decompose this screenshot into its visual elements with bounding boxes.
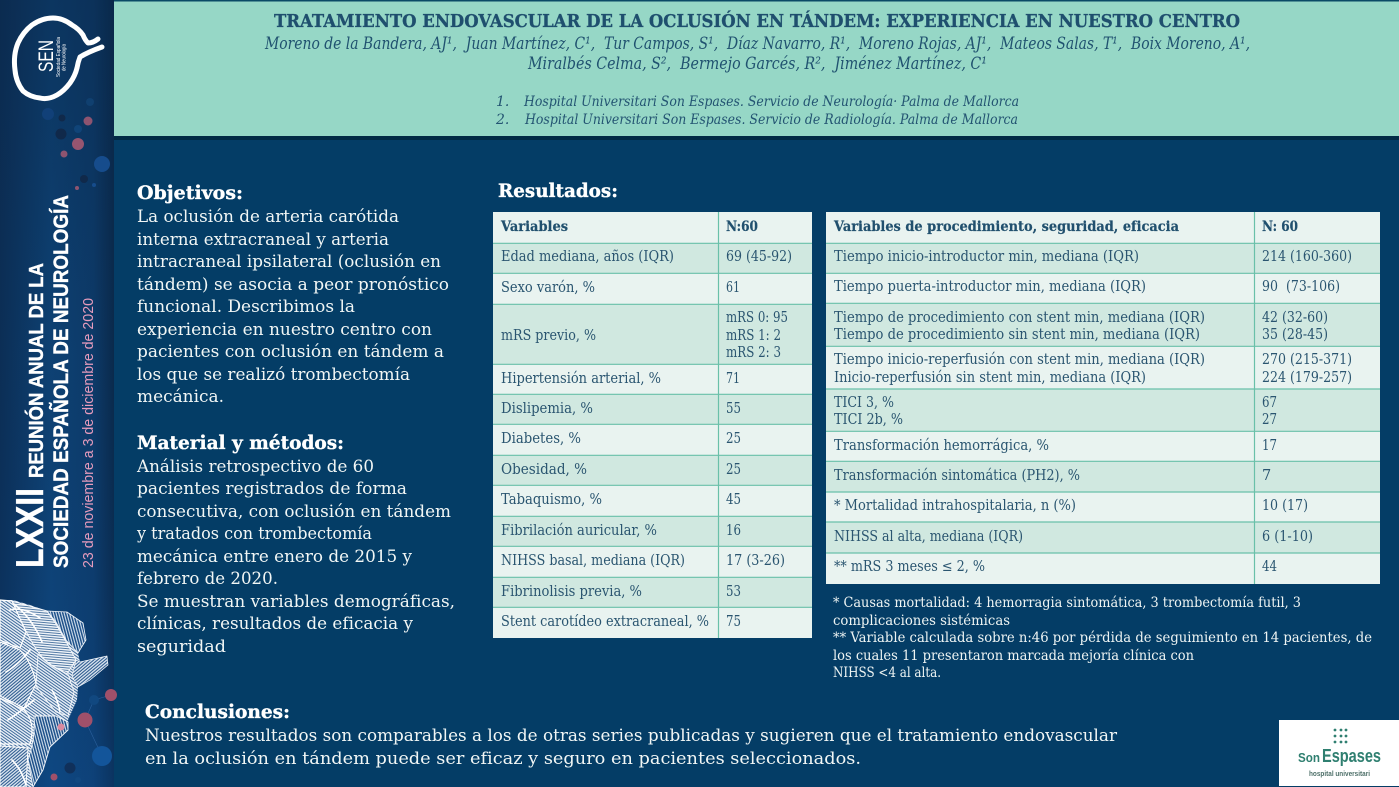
table: variables de procedimiento [826,212,1380,584]
row: transformacion hemorragica [834,438,1277,454]
congress title rotated: LXXII [9,488,52,568]
header panel [114,0,1399,140]
row: puerta-introductor: 90 (73-106) [1262,279,1340,295]
authors [264,34,1250,73]
row: inicio-reperfusion: Tiempo inicio-reperfusión con stent min, mediana (IQR) [834,352,1205,368]
row: obesidad: 25 [726,462,741,478]
row: stent: 75 [726,614,741,630]
row: fibrilacion: 16 [726,523,741,539]
row: edad: 69 (45-92) [726,249,792,265]
row: hipertension: Hipertensión arterial, % [501,371,661,387]
row: NIHSS al alta: NIHSS al alta, mediana (IQR) [834,529,1023,545]
row: dislipemia [501,401,741,417]
row: inicio-reperfusion: 270 (215-371) [1262,352,1352,368]
icon: SEN logo: SEN [35,40,58,72]
congress dates: 23 de noviembre a 3 de diciembre de 2020 [80,298,97,568]
molecule dots bottom [50,689,117,783]
row: edad: Edad mediana, años (IQR) [501,249,674,265]
material y metodos body: pacientes registrados de forma [137,479,407,498]
molecule dots top [42,98,110,190]
row: sexo: 61 [726,280,740,296]
icon: SEN logo: de Neurología [62,44,68,71]
affiliations: 1. [496,94,509,110]
row: mRS previo: mRS 1: 2 [726,328,781,344]
objetivos body: funcional. Describimos la [137,297,355,316]
row: tabaquismo: 45 [726,492,741,508]
row: tiempo de procedimiento: 42 (32-60) [1262,310,1328,326]
row: TICI: TICI 3, % [834,395,894,411]
row: transformacion sintomatica [834,468,1271,484]
objetivos body: los que se realizó trombectomía [137,365,410,384]
row: TICI [834,395,1277,428]
row: tabaquismo [501,492,741,508]
row: hipertension: 71 [726,371,740,387]
conclusiones [145,701,1117,768]
table header [500,219,758,235]
material y metodos body: Análisis retrospectivo de 60 [136,457,374,476]
row: TICI: 27 [1262,412,1277,428]
material y metodos body [136,457,455,656]
icon: wireframe brain [0,600,108,787]
footnotes: los cuales 11 presentaron marcada mejoría clínica con [833,648,1194,664]
heading: material y metodos: Material y métodos: [137,432,344,454]
row: NIHSS al alta: 6 (1-10) [1262,529,1313,545]
row: stent: Stent carotídeo extracraneal, % [501,614,709,630]
congress title rotated [9,195,73,568]
row: inicio-introductor: 214 (160-360) [1262,249,1352,265]
table header: N:60 [726,219,758,235]
row: transformacion sintomatica: Transformación sintomática (PH2), % [834,468,1080,484]
row: mRS 3 meses: ** mRS 3 meses ≤ 2, % [834,559,985,575]
row: NIHSS basal: NIHSS basal, mediana (IQR) [501,553,685,569]
authors: Moreno de la Bandera, AJ¹, Juan Martínez, C¹, Tur Campos, S¹, Díaz Navarro, R¹, Moreno Rojas, AJ¹, Mateos Salas, T¹, Boix Moreno, A¹, [264,34,1250,53]
footnotes: NIHSS <4 al alta. [833,665,941,681]
material y metodos body: febrero de 2020. [137,569,278,588]
objetivos body: experiencia en nuestro centro con [137,320,432,339]
row: mortalidad: 10 (17) [1262,498,1308,514]
row: puerta-introductor: Tiempo puerta-introductor min, mediana (IQR) [834,279,1146,295]
row: mRS previo: mRS previo, % [501,328,596,344]
row: tiempo de procedimiento: 35 (28-45) [1262,327,1328,343]
row: puerta-introductor [834,279,1340,295]
row: diabetes [501,431,741,447]
row: diabetes: 25 [726,431,741,447]
footnotes: * Causas mortalidad: 4 hemorragia sintomática, 3 trombectomía futil, 3 [833,595,1301,611]
logo: Son Espases: hospital universitari [1309,769,1370,778]
row: obesidad [501,462,741,478]
row: dislipemia: 55 [726,401,741,417]
sidebar [0,0,117,787]
material y metodos text block [136,432,455,656]
table header: N: 60 [1262,219,1298,235]
objetivos body: intracraneal ipsilateral (oclusión en [137,252,441,271]
row: fibrilacion: Fibrilación auricular, % [501,523,657,539]
table: variables basales [493,212,812,638]
heading: resultados: Resultados: [498,180,618,202]
objetivos body: mecánica. [137,387,224,406]
row: tiempo de procedimiento [834,310,1328,343]
heading: objetivos: Objetivos: [137,182,243,204]
affiliations: Hospital Universitari Son Espases. Servicio de Radiología. Palma de Mallorca [524,112,1018,128]
row: fibrinolisis [501,584,741,600]
row: sexo: Sexo varón, % [501,280,595,296]
table header: Variables [500,219,568,235]
objetivos body: pacientes con oclusión en tándem a [137,342,444,361]
row: dislipemia: Dislipemia, % [501,401,593,417]
row: NIHSS basal: 17 (3-26) [726,553,785,569]
row: TICI: TICI 2b, % [834,412,903,428]
affiliations: 2. [495,112,509,128]
row: transformacion hemorragica: Transformación hemorrágica, % [834,438,1049,454]
row: inicio-reperfusion [834,352,1352,386]
objetivos body [137,207,449,406]
material y metodos body: consecutiva, con oclusión en tándem [137,502,451,521]
row: mortalidad: * Mortalidad intrahospitalaria, n (%) [834,498,1076,514]
row: inicio-introductor: Tiempo inicio-introductor min, mediana (IQR) [834,249,1139,265]
objetivos text block [137,182,449,406]
row: edad [501,249,792,265]
conclusiones body: Nuestros resultados son comparables a los de otras series publicadas y sugieren que el tratamiento endovascular [145,726,1117,745]
logo: Son Espases: Espases [1322,746,1381,766]
title: TRATAMIENTO ENDOVASCULAR DE LA OCLUSIÓN EN TÁNDEM: EXPERIENCIA EN NUESTRO CENTRO [274,9,1240,32]
logo: Son Espases: Son [1298,750,1320,765]
row: diabetes: Diabetes, % [501,431,581,447]
icon: SEN logo [14,18,102,99]
row: inicio-reperfusion: 224 (179-257) [1262,370,1352,386]
objetivos body: tándem) se asocia a peor pronóstico [137,275,449,294]
congress title rotated: REUNIÓN ANUAL DE LA [24,263,48,478]
row: inicio-introductor [834,249,1352,265]
material y metodos body: y tratados con trombectomía [136,524,372,543]
material y metodos body: mecánica entre enero de 2015 y [137,547,413,566]
row: mortalidad [834,498,1308,514]
objetivos body: La oclusión de arteria carótida [137,207,399,226]
row: mRS previo [501,310,788,361]
row: fibrinolisis: Fibrinolisis previa, % [501,584,642,600]
affiliations [495,94,1019,128]
congress title rotated: SOCIEDAD ESPAÑOLA DE NEUROLOGÍA [50,195,73,568]
row: inicio-reperfusion: Inicio-reperfusión sin stent min, mediana (IQR) [834,370,1146,386]
footnotes: ** Variable calculada sobre n:46 por pérdida de seguimiento en 14 pacientes, de [833,630,1372,646]
affiliations: Hospital Universitari Son Espases. Servicio de Neurología· Palma de Mallorca [523,94,1019,110]
table header: Variables de procedimiento, seguridad, eficacia [833,219,1179,235]
row: mRS previo: mRS 0: 95 [726,310,788,326]
row: fibrinolisis: 53 [726,584,741,600]
row: tiempo de procedimiento: Tiempo de procedimiento con stent min, mediana (IQR) [834,310,1205,326]
objetivos body: interna extracraneal y arteria [137,230,389,249]
row: TICI: 67 [1262,395,1277,411]
footnotes [833,595,1372,681]
logo: Son Espases [1279,720,1399,786]
row: transformacion hemorragica: 17 [1262,438,1277,454]
row: sexo [501,280,740,296]
row: transformacion sintomatica: 7 [1262,468,1271,484]
conclusiones body [145,726,1117,768]
icon: SEN logo: Sociedad Española [56,37,62,77]
row: NIHSS al alta [834,529,1313,545]
footnotes: complicaciones sistémicas [833,613,1010,629]
row: mRS 3 meses [834,559,1277,575]
conclusiones body: en la oclusión en tándem puede ser eficaz y seguro en pacientes seleccionados. [145,749,861,768]
material y metodos body: clínicas, resultados de eficacia y [137,614,414,633]
heading: conclusiones: Conclusiones: [145,701,290,723]
row: mRS 3 meses: 44 [1262,559,1277,575]
row: mRS previo: mRS 2: 3 [726,345,781,361]
row: obesidad: Obesidad, % [501,462,587,478]
authors: Miralbés Celma, S², Bermejo Garcés, R², Jiménez Martínez, C¹ [527,54,987,73]
row: tiempo de procedimiento: Tiempo de procedimiento sin stent min, mediana (IQR) [834,327,1200,343]
material y metodos body: seguridad [137,637,226,656]
row: tabaquismo: Tabaquismo, % [501,492,602,508]
material y metodos body: Se muestran variables demográficas, [137,592,455,611]
